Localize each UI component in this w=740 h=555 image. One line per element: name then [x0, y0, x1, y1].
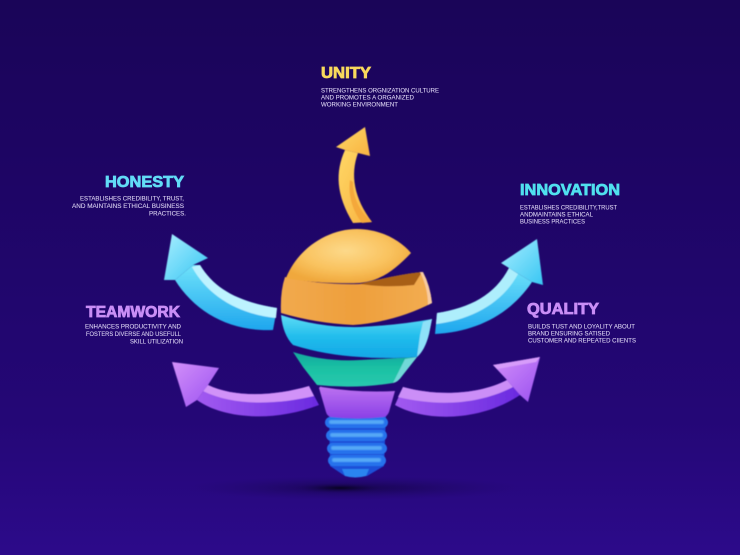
heading and text: unity: UNITY [321, 65, 371, 82]
heading and text: unity: STRENGTHENS ORGNIZATION CULTURE [321, 88, 440, 94]
bulb cyan band [281, 315, 432, 358]
arrow: teamwork [172, 362, 319, 416]
lightbulb [281, 229, 432, 478]
heading and text: innovation [520, 182, 620, 226]
arrow: honesty [164, 234, 277, 330]
bulb orange band [281, 272, 432, 325]
heading and text: teamwork: TEAMWORK [86, 304, 180, 321]
heading and text: quality: BUILDS TUST AND LOYALITY ABOUT [528, 324, 635, 330]
heading and text: innovation: ESTABLISHES CREDIBILITY,TRUST [520, 204, 617, 212]
arrow: innovation [435, 239, 543, 334]
heading and text: innovation: ANDMAINTAINS ETHICAL [520, 212, 593, 218]
heading and text: innovation: BUSINESS PRACTICES [520, 218, 586, 226]
heading and text: unity: AND PROMOTES A ORGANIZED [321, 94, 414, 102]
heading and text: honesty [72, 174, 186, 218]
heading and text: teamwork: ENHANCES PRODUCTIVITY AND [85, 324, 181, 330]
heading and text: quality: CUSTOMER AND REPEATED CIIENTS [528, 338, 637, 344]
heading and text: unity [321, 65, 440, 108]
arrow: unity [336, 127, 372, 223]
bulb teal band [293, 352, 417, 387]
heading and text: quality: BRAND ENSURING SATISED [528, 330, 610, 338]
heading and text: honesty: AND MAINTAINS ETHICAL BUSINESS [72, 203, 185, 210]
heading and text: quality: QUALITY [527, 301, 599, 318]
arrow: quality [395, 357, 540, 417]
heading and text: honesty: PRACTICES. [149, 210, 186, 218]
bulb purple collar [319, 387, 395, 418]
heading and text: quality [527, 301, 637, 344]
heading and text: innovation: INNOVATION [520, 182, 620, 199]
heading and text: teamwork: SKILL UTILIZATION [130, 338, 183, 346]
heading and text: honesty: HONESTY [105, 174, 184, 191]
bulb dome [286, 229, 411, 283]
heading and text: unity: WORKING ENVIRONMENT [321, 102, 398, 108]
heading and text: teamwork [85, 304, 183, 346]
bulb screw base [325, 416, 388, 478]
heading and text: honesty: ESTABLISHES CREDIBILITY, TRUST, [80, 196, 184, 202]
heading and text: teamwork: FOSTERS DIVERSE AND USEFULL [86, 331, 181, 338]
ground shadow [185, 476, 525, 500]
